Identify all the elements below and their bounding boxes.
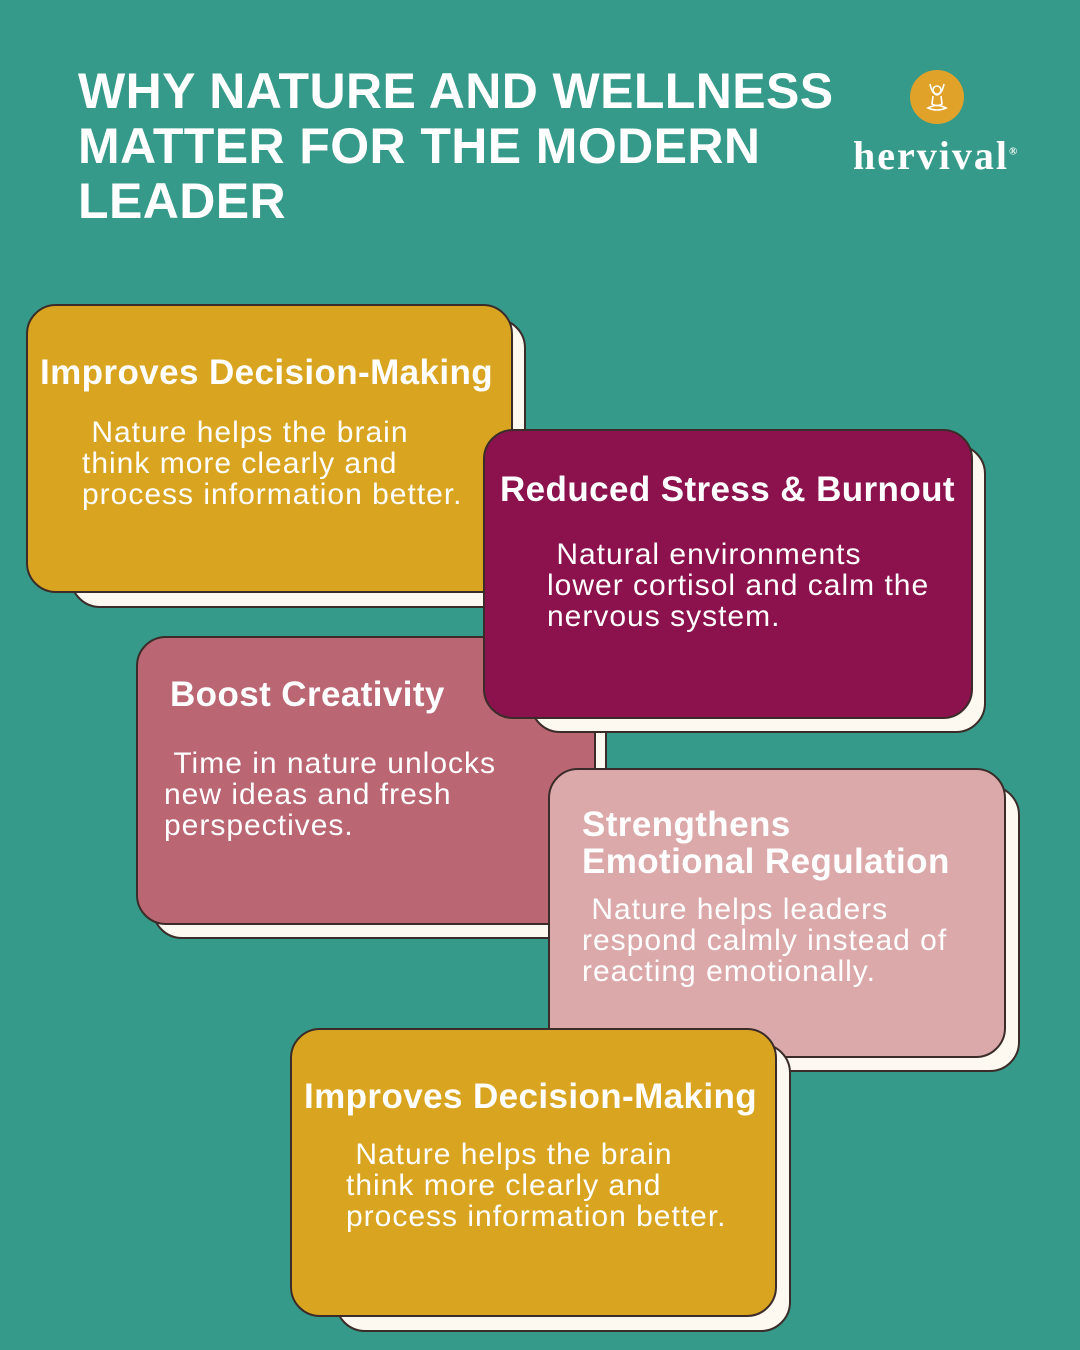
- body text: think more clearly and: [82, 447, 397, 480]
- brand name: hervival®: [853, 133, 1019, 178]
- body text: [82, 416, 463, 511]
- card 2: stress: [483, 429, 986, 733]
- body text: process information better.: [82, 478, 463, 511]
- card 5: decision-making repeat: [290, 1028, 791, 1332]
- body text: [582, 893, 947, 988]
- card 4: emotional regulation: [548, 768, 1020, 1072]
- heading: Improves Decision-Making: [40, 353, 493, 392]
- icon: meditation circle: [910, 70, 964, 124]
- body text: process information better.: [346, 1200, 727, 1233]
- heading: Emotional Regulation: [582, 842, 950, 881]
- body text: Time in nature unlocks: [173, 747, 496, 780]
- body text: Natural environments: [556, 538, 861, 571]
- body text: Nature helps the brain: [91, 416, 409, 449]
- body text: Nature helps the brain: [355, 1138, 673, 1171]
- body text: [346, 1138, 727, 1233]
- heading: Boost Creativity: [170, 675, 445, 714]
- heading: Strengthens: [582, 805, 791, 844]
- title: WHY NATURE AND WELLNESS: [78, 63, 834, 119]
- card 3: creativity: [136, 636, 607, 939]
- title: MATTER FOR THE MODERN: [78, 118, 760, 174]
- body text: nervous system.: [547, 600, 780, 633]
- logo: [853, 70, 1019, 178]
- body text: perspectives.: [164, 809, 354, 842]
- body text: new ideas and fresh: [164, 778, 452, 811]
- body text: respond calmly instead of: [582, 924, 947, 957]
- body text: lower cortisol and calm the: [547, 569, 929, 602]
- heading: Improves Decision-Making: [304, 1077, 757, 1116]
- body text: [547, 538, 929, 633]
- heading: [582, 805, 950, 881]
- title: LEADER: [78, 173, 286, 229]
- title: [78, 63, 834, 229]
- body text: Nature helps leaders: [591, 893, 888, 926]
- card 1: decision-making: [26, 304, 526, 608]
- body text: think more clearly and: [346, 1169, 661, 1202]
- heading: Reduced Stress & Burnout: [500, 470, 955, 509]
- body text: [164, 747, 496, 842]
- body text: reacting emotionally.: [582, 955, 876, 988]
